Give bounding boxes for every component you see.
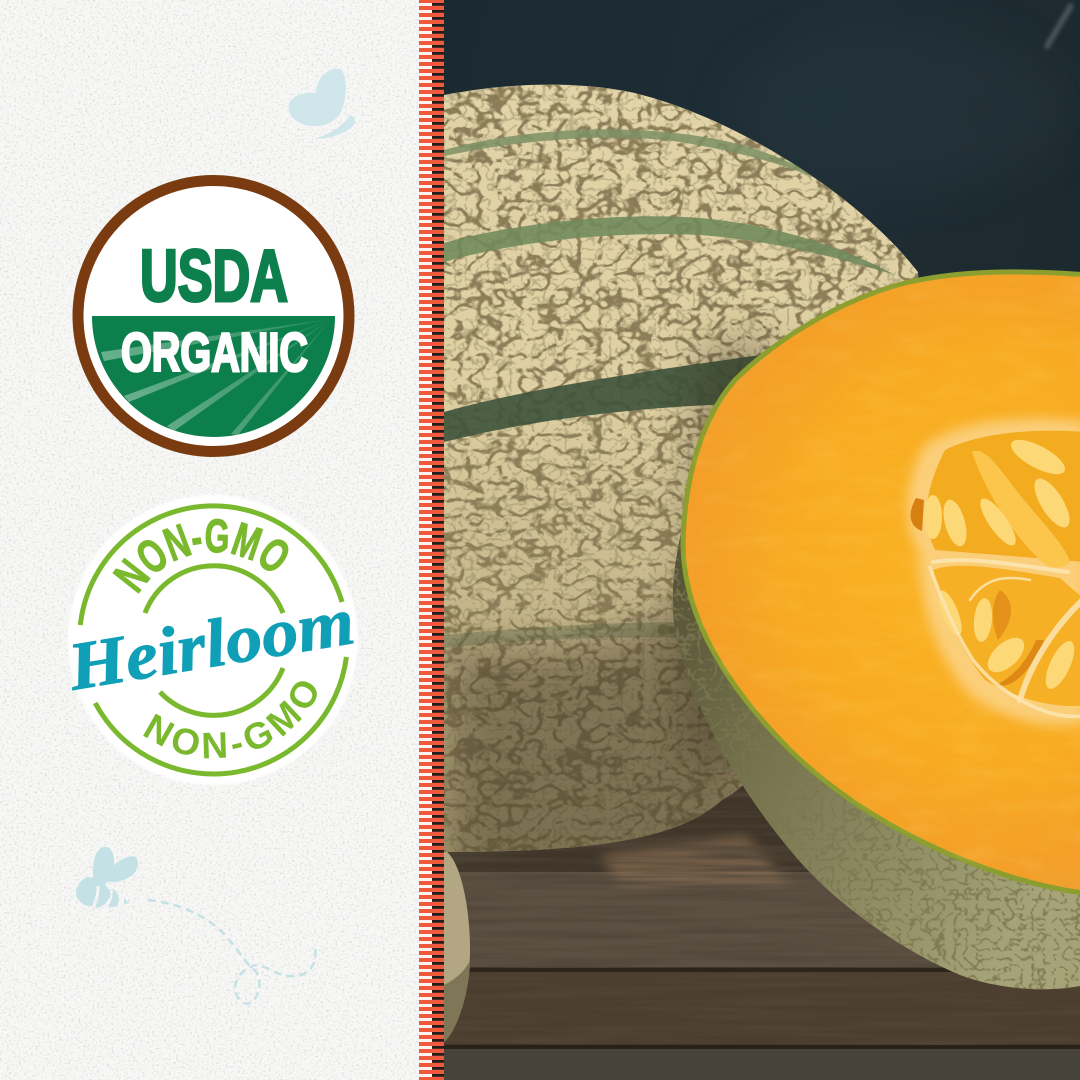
badge text: NON-GMO bottom: NON-GMO	[143, 681, 317, 758]
badge text: NON-GMO top: NON-GMO	[112, 518, 288, 594]
small melon at bottom left	[444, 850, 470, 1042]
badge green field	[92, 316, 335, 437]
badge: USDA Organic	[78, 180, 349, 452]
melon seed cavity	[907, 419, 1080, 725]
melon stripe: lower dark	[444, 355, 760, 442]
melon stripe: middle	[444, 216, 895, 275]
badge outer rings	[80, 506, 346, 774]
badge text: Heirloom script: Heirloom	[62, 582, 360, 705]
melon cream fibres	[930, 560, 1080, 716]
badge: Non-GMO Heirloom	[62, 494, 360, 786]
melon cavity shadows	[911, 498, 1044, 686]
melon seeds	[924, 433, 1080, 693]
icon: butterfly	[289, 69, 355, 139]
icon: bee with dashed flight path	[76, 847, 315, 1004]
melon netting texture	[444, 80, 934, 855]
melon shadow	[444, 340, 780, 880]
photo background: dark slate wall	[444, 0, 1080, 278]
melon seed: long central fibre	[972, 451, 1070, 568]
bee dashed path	[148, 900, 315, 1004]
half cantaloupe rind	[672, 534, 1080, 990]
melon stripe: upper	[444, 129, 814, 178]
badge text: ORGANIC: ORGANIC	[121, 321, 308, 383]
whole cantaloupe, back	[444, 80, 934, 880]
panel: fabric background	[0, 0, 420, 1080]
half cantaloupe flesh	[680, 270, 1080, 900]
badge text: USDA: USDA	[140, 236, 288, 317]
photo: cantaloupe melons on wooden table	[444, 0, 1080, 1080]
badge white halo	[68, 495, 358, 785]
badge ring	[78, 180, 349, 452]
wooden table	[444, 785, 1080, 1080]
badge sun rays	[101, 319, 330, 435]
stitched red stripe border	[419, 0, 444, 1080]
bee body and wings	[76, 847, 138, 908]
